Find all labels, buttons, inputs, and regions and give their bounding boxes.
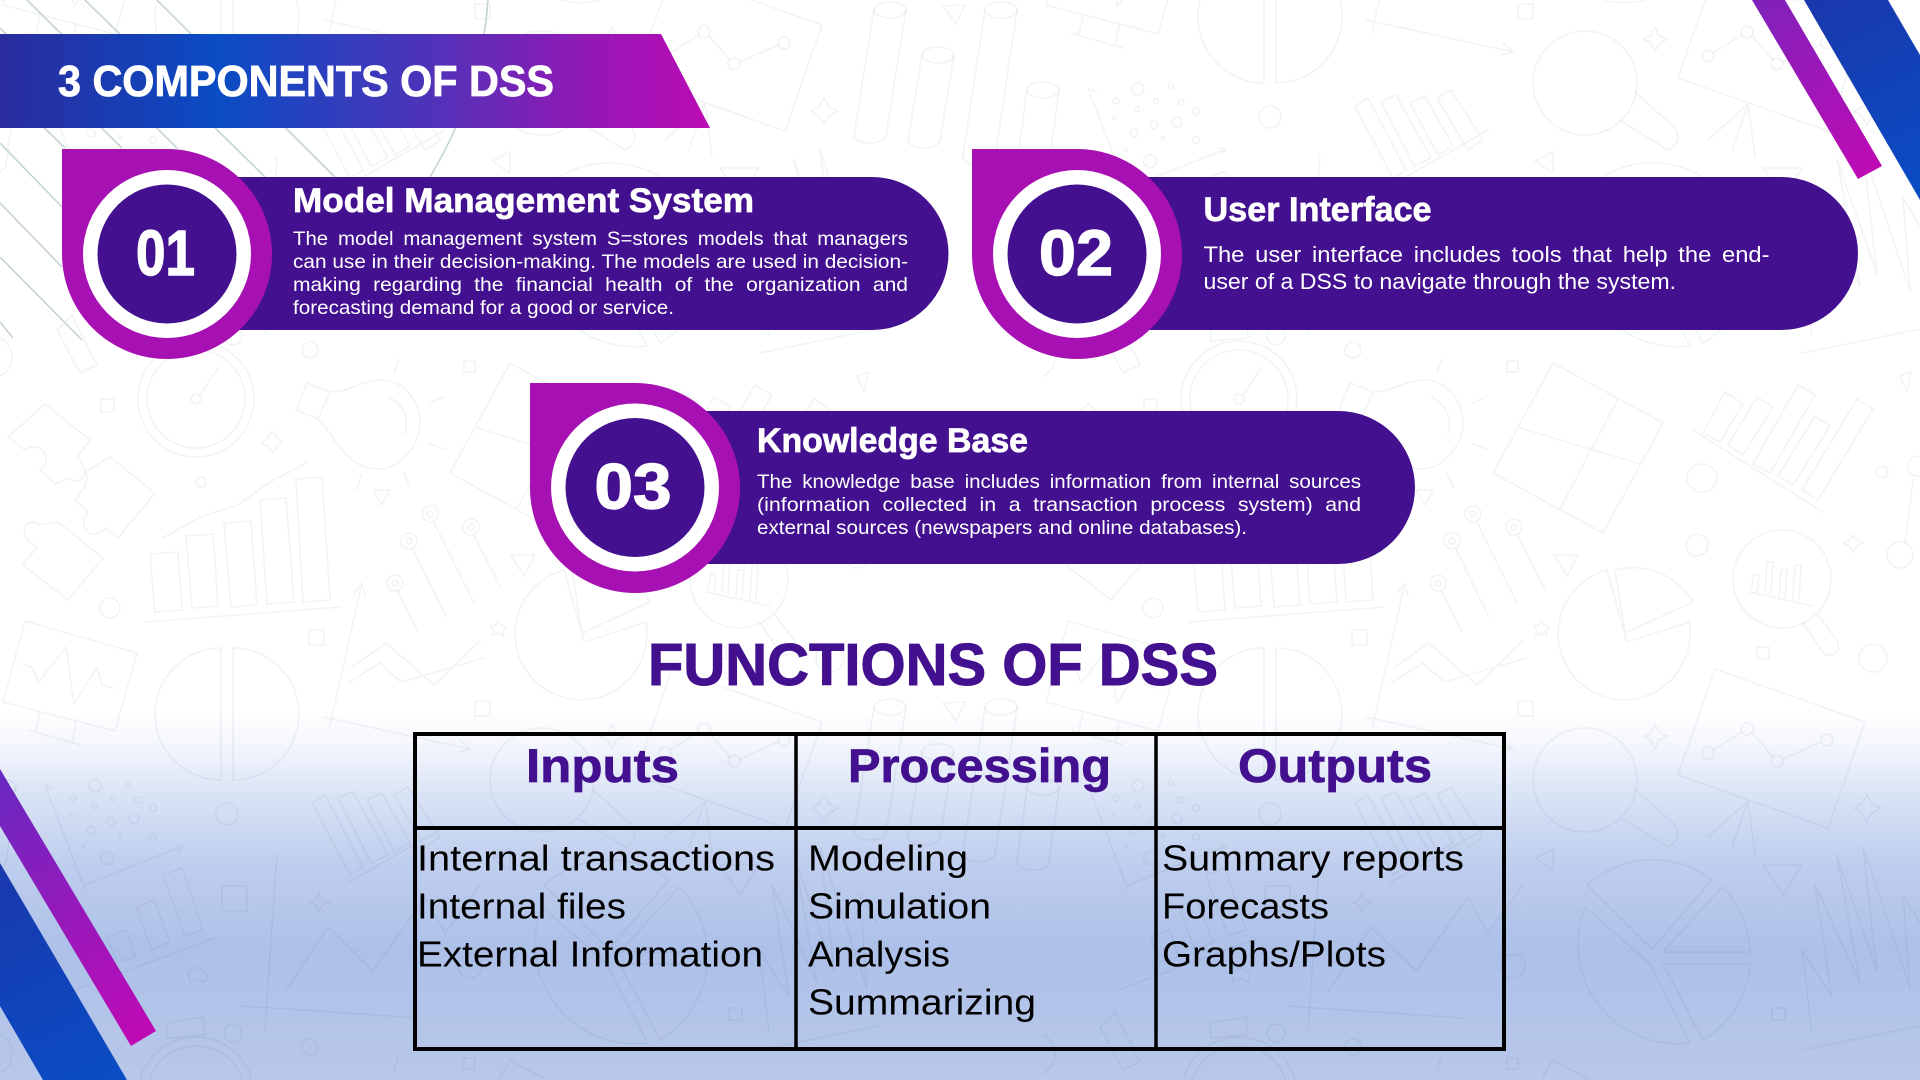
column headers: Inputs (526, 739, 679, 792)
text: user interface description (1204, 242, 1770, 294)
column: processing list: Modeling (808, 838, 968, 878)
column: processing list: Summarizing (808, 982, 1036, 1022)
panel: component 03 knowledge base (530, 383, 1415, 593)
column: inputs list: Internal files (417, 886, 626, 926)
badge: 01: 01 (136, 217, 195, 289)
text: knowledge base description (757, 471, 1361, 539)
column: processing list (808, 838, 1036, 1022)
badge: 01 (62, 149, 272, 359)
text: knowledge base description: The knowledge base includes information from internal sources (757, 471, 1361, 493)
panel: component 02 user interface (972, 149, 1858, 359)
column: outputs list: Summary reports (1162, 838, 1464, 878)
panel: component 01 model management system (62, 149, 948, 359)
column headers: Processing (848, 739, 1111, 792)
badge: 02 (972, 149, 1182, 359)
column: inputs list: Internal transactions (417, 838, 775, 878)
decoration: bottom left slanted bands (0, 769, 156, 1080)
badge: 03: 03 (594, 450, 672, 522)
text: model management description: making regarding the financial health of the organization and (293, 274, 908, 296)
text: knowledge base description: external sources (newspapers and online databases). (757, 517, 1247, 539)
title banner: 3 components of DSS: 3 COMPONENTS OF DSS (58, 57, 554, 106)
column: outputs list (1162, 838, 1464, 974)
text: model management description: The model management system S=stores models that managers (293, 228, 908, 250)
heading: user interface: User Interface (1204, 191, 1432, 229)
heading: functions of DSS: FUNCTIONS OF DSS (648, 632, 1218, 698)
column headers: Outputs (1238, 739, 1432, 792)
text: user interface description: The user interface includes tools that help the end- (1204, 242, 1770, 267)
column: processing list: Analysis (808, 934, 950, 974)
heading: model management system: Model Management System (293, 182, 754, 220)
column: outputs list: Graphs/Plots (1162, 934, 1386, 974)
title banner: 3 components of DSS (0, 34, 710, 128)
table grid (415, 734, 1504, 1049)
table: inputs, processing, outputs (415, 734, 1504, 1049)
text: model management description: can use in their decision-making. The models are used in decision- (293, 251, 908, 273)
text: model management description: forecasting demand for a good or service. (293, 297, 674, 319)
badge: 03 (530, 383, 740, 593)
column: outputs list: Forecasts (1162, 886, 1329, 926)
column: processing list: Simulation (808, 886, 991, 926)
column headers (526, 739, 1432, 792)
decoration: top right slanted bands (1752, 0, 1920, 200)
text: user interface description: user of a DSS to navigate through the system. (1204, 269, 1676, 294)
text: model management description (293, 228, 908, 319)
text: knowledge base description: (information collected in a transaction process system) and (757, 494, 1361, 516)
badge: 02: 02 (1039, 217, 1113, 289)
heading: knowledge base: Knowledge Base (757, 422, 1028, 460)
column: inputs list: External Information (417, 934, 763, 974)
column: inputs list (417, 838, 775, 974)
